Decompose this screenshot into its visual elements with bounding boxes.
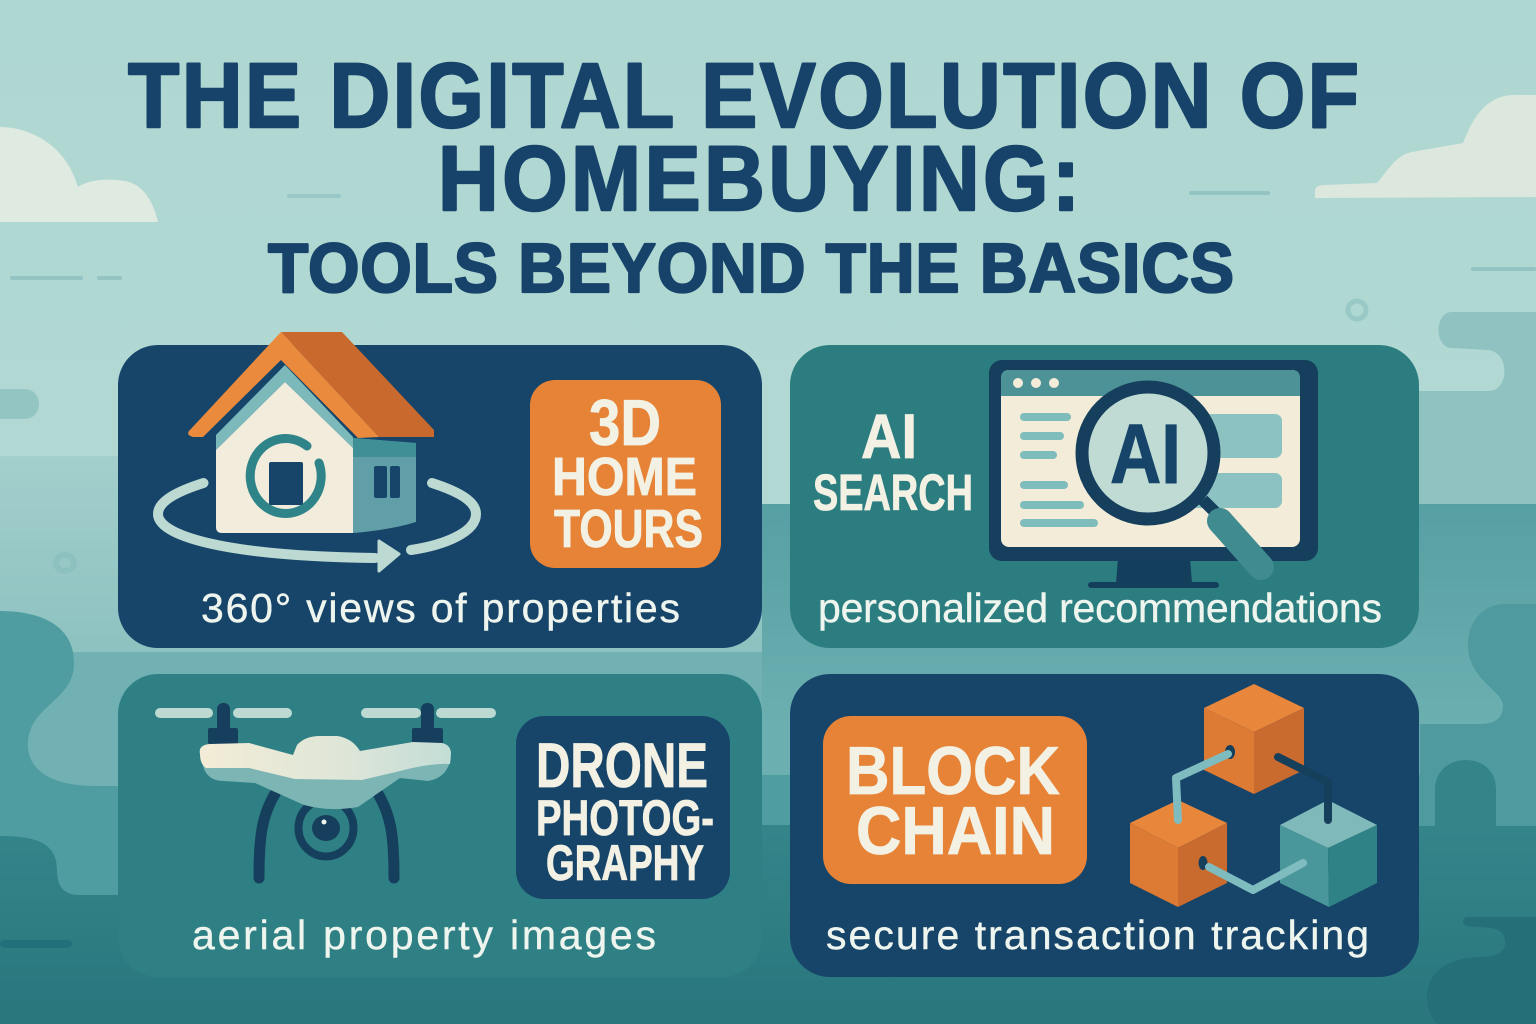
panel: drone photography	[118, 674, 762, 977]
tag: drone photography: PHOTOG-	[536, 790, 714, 846]
label: AI search	[813, 402, 973, 521]
panel: blockchain	[790, 674, 1419, 977]
icon: drone	[155, 703, 496, 878]
tag: blockchain: BLOCK	[846, 733, 1060, 809]
icon: monitor with magnifier	[989, 360, 1318, 588]
icon: monitor with magnifier: AI	[1110, 407, 1181, 501]
tag: blockchain	[823, 716, 1087, 884]
caption: aerial property images	[192, 912, 656, 958]
panel: 3D home tours	[118, 332, 762, 648]
tag: drone photography: GRAPHY	[546, 835, 704, 891]
label: AI search: SEARCH	[813, 464, 973, 521]
label: AI search: AI	[861, 402, 917, 472]
icon: chained blocks	[1130, 684, 1377, 907]
title: HOMEBUYING:	[438, 127, 1080, 230]
tag: 3D home tours	[530, 380, 721, 568]
tag: drone photography: DRONE	[536, 731, 708, 801]
icon: rotating house	[158, 332, 476, 571]
tag: 3D home tours: HOME	[552, 447, 697, 507]
panel: AI search	[790, 345, 1419, 648]
caption: personalized recommendations	[818, 585, 1382, 631]
tag: 3D home tours: 3D	[589, 386, 661, 459]
tag: drone photography	[516, 716, 730, 899]
caption: 360° views of properties	[201, 585, 680, 631]
title	[128, 44, 1359, 307]
title: THE DIGITAL EVOLUTION OF	[128, 44, 1359, 147]
tag: 3D home tours: TOURS	[554, 499, 703, 559]
caption: secure transaction tracking	[826, 912, 1369, 958]
tag: blockchain: CHAIN	[856, 793, 1055, 869]
title: TOOLS BEYOND THE BASICS	[268, 231, 1234, 307]
